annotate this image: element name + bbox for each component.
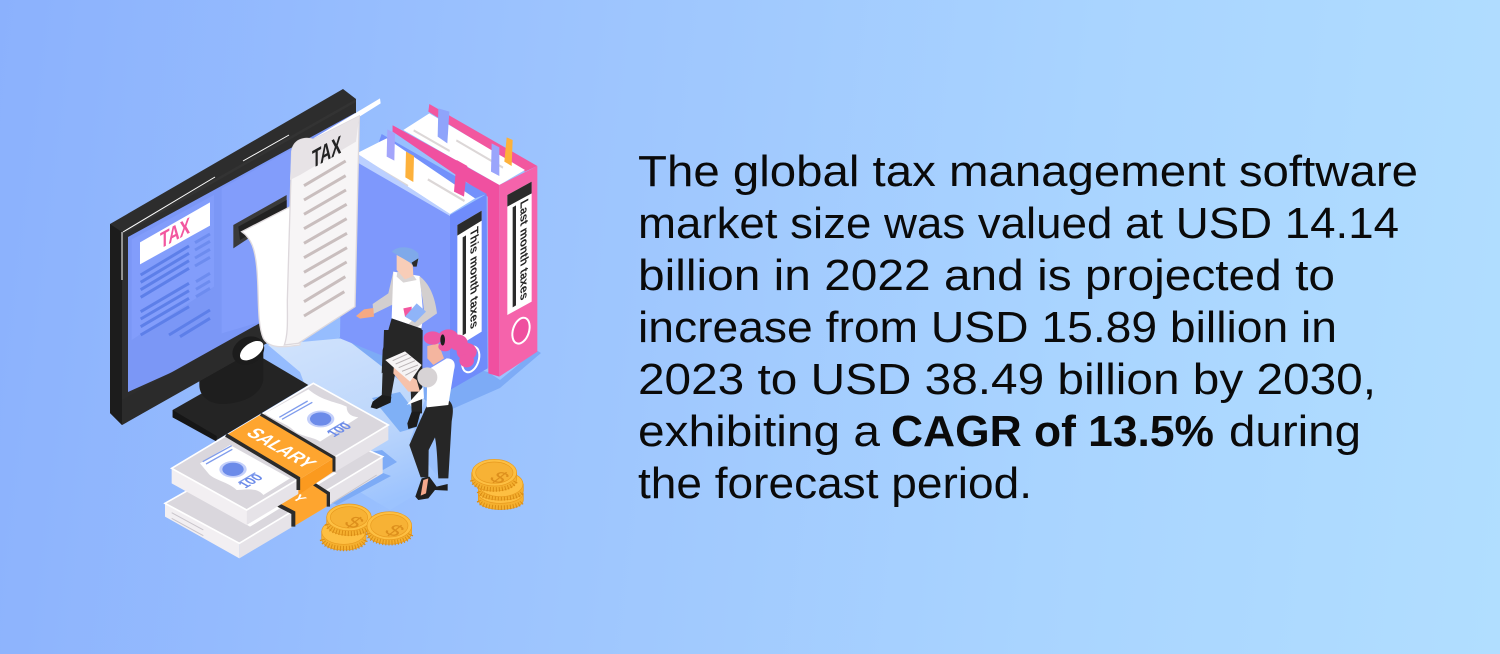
left document panel bbox=[132, 113, 357, 340]
camera joint bbox=[227, 331, 269, 371]
man folder bbox=[403, 307, 412, 320]
printed tax receipt bbox=[233, 98, 381, 347]
woman legs bbox=[409, 401, 453, 478]
market size description text: market size was valued at USD 14.14 bbox=[638, 199, 1399, 248]
salary cash stacks bbox=[165, 383, 523, 558]
binder ring bbox=[509, 316, 533, 346]
market size description text: The global tax management software bbox=[638, 147, 1418, 196]
man right arm bbox=[408, 276, 437, 329]
paper top flap bbox=[313, 98, 381, 138]
screen glare lines bbox=[122, 135, 289, 280]
woman with document bbox=[385, 329, 477, 500]
market size description text: the forecast period. bbox=[638, 459, 1032, 508]
lower stack: Y bbox=[289, 492, 310, 504]
lower stack bbox=[165, 423, 383, 558]
left document panel: TAX bbox=[160, 213, 190, 255]
printer slot bbox=[233, 195, 287, 248]
dollar marks bbox=[339, 468, 516, 541]
upper stack: 100 bbox=[234, 471, 267, 490]
floor light and shadows bbox=[268, 335, 541, 510]
receipt sheet bbox=[284, 116, 359, 345]
market size description text: 2023 to USD 38.49 billion by 2030, bbox=[638, 355, 1376, 404]
blue binder: this month taxes bbox=[340, 125, 488, 390]
dollar marks: $ bbox=[339, 512, 370, 532]
computer monitor bbox=[110, 89, 357, 442]
coin pile right bbox=[472, 459, 523, 509]
man torso bbox=[392, 272, 423, 329]
coin pile left bbox=[322, 504, 412, 550]
market size description text: during bbox=[1229, 407, 1361, 456]
gold coins bbox=[322, 459, 523, 550]
upper stack: SALARY bbox=[241, 426, 321, 472]
dollar marks: $ bbox=[379, 521, 411, 541]
monitor stand bbox=[173, 343, 308, 442]
market size description text: billion in 2022 and is projected to bbox=[638, 251, 1335, 300]
market size description text: exhibiting a bbox=[638, 407, 881, 456]
banknote faces bbox=[200, 445, 290, 495]
curled paper bbox=[242, 202, 300, 347]
spine label: This month taxes bbox=[468, 224, 481, 332]
man with folder bbox=[356, 247, 437, 429]
woman shoes bbox=[415, 477, 448, 500]
spine label: Last month taxes bbox=[518, 196, 531, 303]
banknote seals bbox=[307, 411, 334, 427]
dollar marks: $ bbox=[484, 468, 516, 488]
woman head and hair bbox=[427, 343, 444, 365]
highlighted CAGR figure: CAGR of 13.5% bbox=[891, 407, 1214, 456]
market size description text: increase from USD 15.89 billion in bbox=[638, 303, 1337, 352]
market size description text bbox=[638, 147, 1418, 508]
spine label bbox=[507, 182, 532, 315]
salary band bbox=[227, 415, 333, 480]
woman torso bbox=[427, 358, 455, 407]
upper stack bbox=[172, 383, 388, 525]
pink binder: last month taxes bbox=[393, 104, 537, 377]
binder ring bbox=[459, 344, 482, 374]
man left arm and hand bbox=[373, 272, 399, 314]
document held bbox=[407, 387, 424, 405]
woman arm bbox=[417, 367, 437, 387]
upper stack: 100 bbox=[323, 420, 355, 439]
man head bbox=[397, 255, 413, 279]
spine label bbox=[457, 211, 482, 347]
man legs and shoes bbox=[371, 330, 423, 429]
illustration: tax paperwork scene bbox=[110, 89, 541, 558]
printed tax receipt: TAX bbox=[312, 129, 341, 174]
